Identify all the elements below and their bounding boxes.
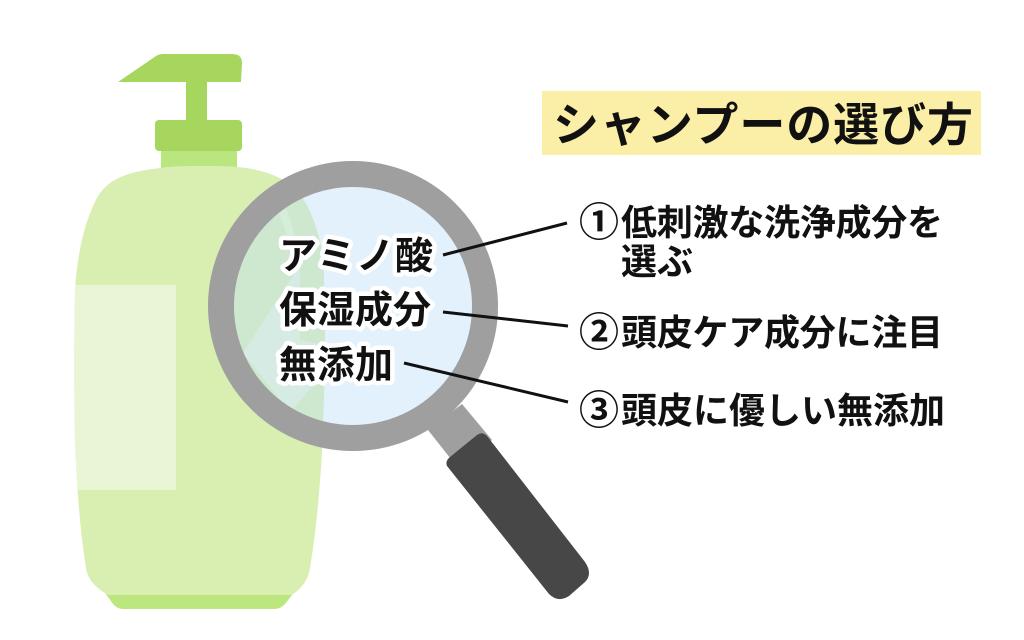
label: additive-free: 無添加 <box>279 345 393 387</box>
lens <box>234 187 472 425</box>
pump collar <box>155 120 242 151</box>
point 3: 頭皮に優しい無添加 <box>621 390 945 431</box>
point 1: 低刺激な洗浄成分を <box>621 202 943 243</box>
leader lines <box>404 223 568 402</box>
pump stem <box>186 80 207 122</box>
label: amino acid: アミノ酸 <box>279 236 433 278</box>
bottle base <box>103 590 296 609</box>
point 1: 選ぶ <box>621 241 693 282</box>
list of selection points <box>579 201 945 433</box>
pump head <box>118 54 242 82</box>
point 1: ① <box>579 201 619 245</box>
lens labels <box>279 236 433 387</box>
label: moisturizing ingredients: 保湿成分 <box>279 290 431 332</box>
handle grip <box>446 433 589 599</box>
point 2: 頭皮ケア成分に注目 <box>621 312 943 353</box>
bottle label <box>70 285 176 490</box>
handle neck <box>428 404 492 468</box>
bottle body <box>74 166 325 595</box>
magnifier ring <box>221 174 485 438</box>
icon: shampoo pump bottle <box>70 54 325 609</box>
title banner <box>542 91 981 155</box>
title: シャンプーの選び方 <box>553 99 973 151</box>
bottle neck <box>161 148 237 170</box>
bottle seen through lens <box>234 198 325 421</box>
point 1 <box>579 201 943 282</box>
point 3: ③ <box>579 389 619 433</box>
point 2: ② <box>579 311 619 355</box>
icon: magnifying glass <box>208 161 589 600</box>
